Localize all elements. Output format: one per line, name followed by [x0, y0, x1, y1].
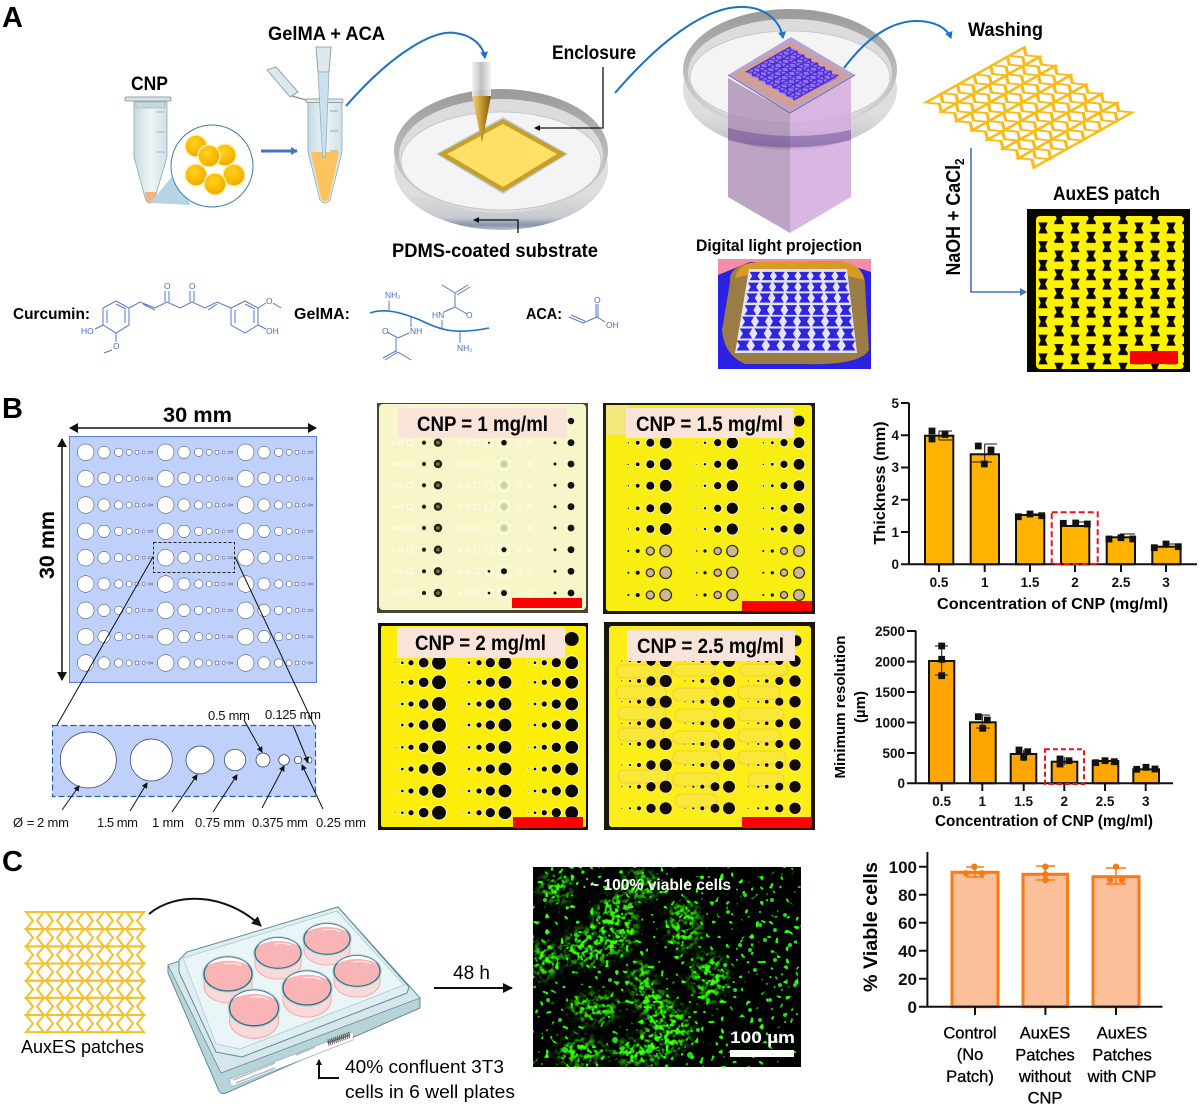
arrow: patches into plate	[149, 899, 261, 926]
panel letter B: B	[2, 393, 23, 425]
chemical structure: curcumin: O	[164, 281, 171, 291]
label: Washing: Washing	[968, 20, 1043, 41]
icon: dish with digital light projection column	[683, 9, 897, 233]
y tick labels: 500	[882, 746, 905, 761]
arrow: height dimension	[61, 439, 63, 680]
x tick labels: 0.5	[932, 794, 952, 809]
chemical structure: ACA	[569, 295, 619, 330]
arrow: CNP to gel precursor	[261, 150, 297, 152]
label: AuxES patch: AuxES patch	[1053, 184, 1160, 205]
arrows: diameter pointers	[62, 720, 323, 812]
x tick labels	[932, 794, 1150, 809]
photo: digital light projection	[718, 259, 871, 369]
chemical structure: GelMA: NH₂	[385, 290, 401, 300]
highlight: selected concentration	[1052, 512, 1098, 564]
photo: CNP 2.5 mg/ml: CNP = 2.5 mg/ml	[637, 635, 784, 658]
chemical structure: GelMA: NH₂	[457, 343, 473, 353]
icon: AuxES patch lattice	[26, 912, 144, 1032]
y tick labels: 1	[891, 525, 899, 540]
y tick labels: 60	[898, 914, 917, 933]
x labels: (No	[957, 1046, 983, 1064]
y tick labels: 100	[889, 858, 917, 877]
photo: CNP 2 mg/ml	[378, 623, 588, 830]
highlight: selected concentration	[1045, 749, 1084, 784]
y tick labels	[875, 624, 905, 791]
design: 30 mm test pattern	[57, 436, 316, 725]
chemical structure: curcumin: OH	[266, 326, 279, 336]
data points	[963, 864, 1125, 883]
label: NaOH + CaCl2: 2	[952, 158, 967, 165]
y tick labels: 2	[891, 493, 899, 508]
chart: percent viable cells	[861, 852, 1162, 1108]
icon: washed yellow auxetic lattice	[926, 47, 1132, 168]
y tick labels: 80	[898, 886, 917, 905]
chart: thickness vs concentration	[872, 396, 1197, 613]
photo: CNP 1.5 mg/ml: CNP = 1.5 mg/ml	[636, 413, 783, 436]
diameter labels: Ø =	[13, 815, 34, 830]
x labels: with CNP	[1087, 1068, 1156, 1086]
label: GelMA: GelMA:	[294, 306, 350, 323]
chemical structure: ACA: O	[594, 295, 601, 305]
diameter labels: 1 mm	[152, 815, 184, 830]
y tick labels: 4	[891, 428, 899, 443]
x labels: Patch)	[946, 1068, 994, 1086]
x tick labels: 1	[981, 575, 989, 590]
icon: 6 well plate	[168, 907, 420, 1094]
arrow: washing to AuxES patch	[971, 148, 1026, 292]
chemical structure: curcumin: O	[189, 281, 196, 291]
x labels: AuxES	[1097, 1024, 1147, 1042]
y tick labels: 2500	[875, 624, 905, 639]
x tick labels: 2.5	[1112, 575, 1131, 590]
arrow: projection to washing	[844, 21, 951, 68]
label: ACA: ACA:	[526, 306, 562, 323]
bars	[929, 661, 1159, 783]
y tick labels: 0	[908, 998, 917, 1017]
chemical structure: curcumin: O	[266, 296, 273, 306]
chemical structure: GelMA: O	[466, 310, 473, 320]
data points	[938, 643, 1158, 773]
label: Enclosure: Enclosure	[552, 43, 636, 64]
x labels	[943, 1024, 1156, 1108]
icon: petri dish with printing nozzle	[394, 62, 608, 230]
label: Curcumin: Curcumin:	[13, 306, 90, 323]
x tick labels: 3	[1162, 575, 1170, 590]
curcumin block	[13, 281, 281, 353]
icon: CNP tube	[125, 97, 171, 203]
y tick labels: 3	[891, 460, 899, 475]
micrograph: viable cells: ~ 100% viable cells	[590, 877, 731, 894]
label: 30 mm width: 30 mm	[163, 404, 232, 427]
bars	[925, 436, 1181, 564]
label: GelMA + ACA: GelMA + ACA	[268, 24, 385, 45]
y axis title: (µm)	[852, 691, 869, 723]
icon: tube with pipette	[267, 47, 343, 203]
diameter labels: 0.125 mm	[265, 707, 321, 722]
photo: CNP 1 mg/ml	[377, 403, 588, 613]
diameter labels: 0.5 mm	[208, 708, 250, 723]
label: CNP: CNP	[131, 74, 168, 95]
bars	[952, 872, 1139, 1007]
y tick labels: 1500	[875, 685, 905, 700]
axes	[901, 403, 1197, 572]
y axis title: Thickness (mm)	[872, 422, 889, 544]
arrow: plate pointer	[319, 1060, 339, 1078]
x labels: Patches	[1092, 1046, 1152, 1064]
micrograph: viable cells	[533, 867, 801, 1067]
y axis title	[832, 636, 869, 778]
x tick labels: 1.5	[1014, 794, 1034, 809]
GelMA block	[294, 285, 489, 360]
annotation: plate cells: 40% confluent 3T3	[345, 1057, 504, 1077]
x tick labels: 1.5	[1021, 575, 1040, 590]
y tick labels: 0	[897, 776, 905, 791]
x tick labels: 0.5	[930, 575, 949, 590]
error bars	[935, 646, 1064, 765]
data points	[929, 428, 1182, 551]
diameter labels: 1.5 mm	[97, 815, 138, 830]
label: Digital light projection: Digital light projection	[696, 236, 862, 255]
design: magnified hole row	[52, 726, 316, 796]
chemical structure: ACA: OH	[606, 320, 619, 330]
arrow: enclosure pointer	[535, 67, 603, 128]
x tick labels: 2	[1061, 794, 1068, 809]
label: AuxES patches: AuxES patches	[21, 1037, 144, 1057]
photo: AuxES patch	[1027, 209, 1190, 372]
diameter labels: 0.75 mm	[195, 815, 245, 830]
annotation: plate cells: cells in 6 well plates	[345, 1082, 515, 1102]
arrow: PDMS pointer	[474, 220, 518, 233]
x tick labels: 2.5	[1096, 794, 1115, 809]
photo: CNP 1 mg/ml: CNP = 1 mg/ml	[417, 413, 548, 436]
x labels: without	[1018, 1068, 1072, 1086]
diameter labels: 0.25 mm	[316, 815, 366, 830]
ACA block	[526, 295, 619, 330]
diameter labels	[13, 707, 366, 830]
x labels: AuxES	[1020, 1024, 1070, 1042]
y tick labels: 20	[898, 970, 917, 989]
micrograph: viable cells: 100 µm	[730, 1028, 795, 1047]
photo: CNP 2.5 mg/ml	[604, 622, 815, 830]
x axis title: Concentration of CNP (mg/ml)	[937, 596, 1168, 613]
icon: magnified CNP nanoparticles	[150, 125, 253, 207]
x tick labels	[930, 575, 1170, 590]
chart: minimum resolution vs concentration	[832, 624, 1173, 830]
error bars	[939, 431, 1180, 548]
chemical structure: curcumin: O	[113, 341, 120, 351]
annotation: plate cells	[345, 1057, 515, 1102]
x labels: CNP	[1028, 1090, 1062, 1108]
chemical structure: GelMA: NH	[410, 326, 422, 336]
label: 48 h: 48 h	[453, 963, 490, 984]
y tick labels: 1000	[875, 716, 905, 730]
x axis title: Concentration of CNP (mg/ml)	[935, 813, 1153, 830]
chemical structure: curcumin	[81, 281, 281, 353]
y axis title: Minimum resolution	[832, 636, 849, 778]
y tick labels: 2000	[875, 654, 905, 670]
label: NaOH + CaCl2: NaOH + CaCl	[943, 152, 965, 276]
arrow: incubation	[434, 987, 512, 989]
axes	[907, 631, 1173, 791]
panel letter C: C	[2, 846, 23, 878]
y tick labels: 0	[891, 557, 899, 572]
arrow: width dimension	[70, 427, 316, 429]
panel C: cytocompatibility	[2, 846, 1162, 1108]
y axis title: % Viable cells	[861, 862, 882, 992]
x labels: Patches	[1015, 1046, 1075, 1064]
chemical structure: GelMA: O	[382, 326, 389, 336]
error bars	[966, 866, 1126, 884]
chemical structure: curcumin: HO	[81, 326, 94, 336]
panel letter A: A	[2, 2, 23, 34]
y tick labels	[891, 396, 899, 572]
chemical structure: GelMA	[370, 285, 489, 360]
y tick labels	[889, 858, 917, 1017]
photo: CNP 2 mg/ml: CNP = 2 mg/ml	[415, 632, 546, 655]
label: 30 mm height: 30 mm	[36, 511, 59, 579]
panel B: resolution tests	[2, 393, 1197, 830]
chemical structure: GelMA: HN	[432, 310, 444, 320]
y tick labels: 5	[891, 396, 899, 411]
diameter labels: 2 mm	[37, 815, 69, 830]
y tick labels: 40	[898, 942, 917, 961]
arrow: gel precursor to printing dish	[346, 33, 485, 106]
x tick labels: 2	[1071, 575, 1079, 590]
arrow: printing dish to projection	[615, 7, 783, 93]
diameter labels: 0.375 mm	[252, 815, 308, 830]
photo: CNP 1.5 mg/ml	[603, 403, 815, 614]
x tick labels: 3	[1142, 794, 1150, 809]
x tick labels: 1	[979, 794, 987, 809]
label: PDMS-coated substrate: PDMS-coated substrate	[392, 241, 598, 262]
panel A: fabrication workflow	[2, 2, 1190, 372]
axes	[919, 852, 1162, 1015]
x labels: Control	[943, 1024, 997, 1042]
